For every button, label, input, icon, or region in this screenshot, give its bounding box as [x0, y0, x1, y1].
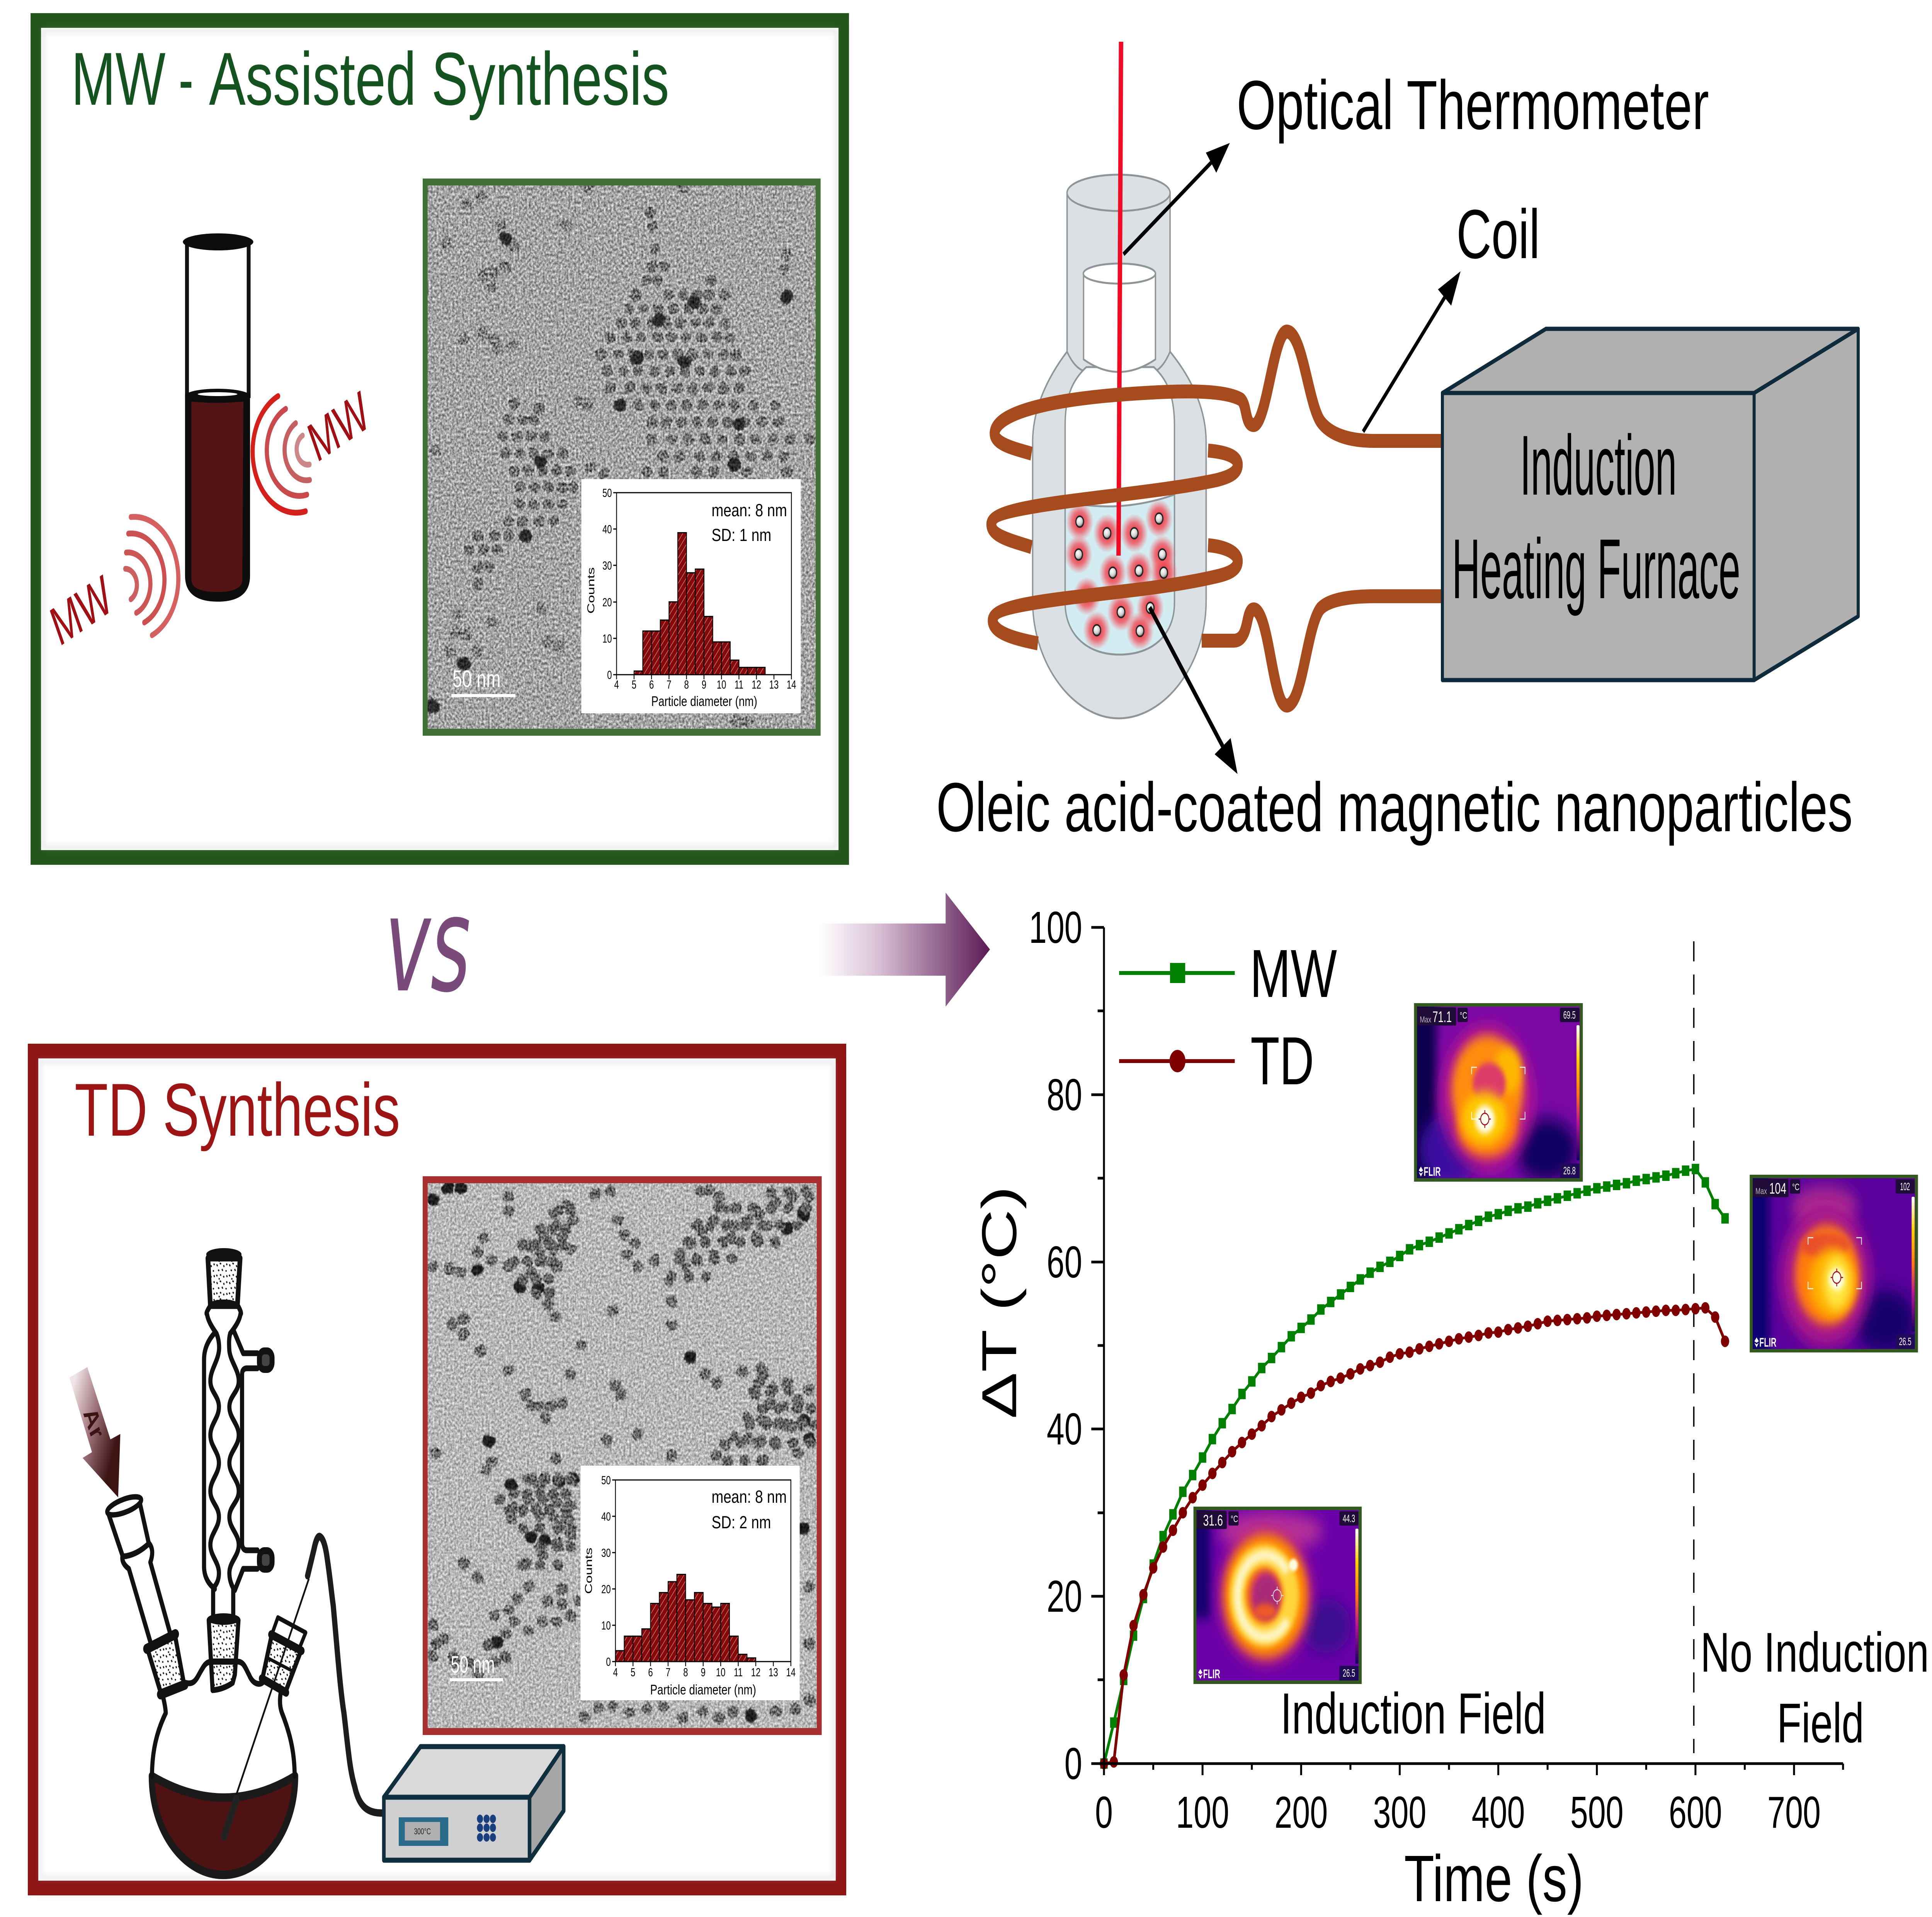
inset histogram: TD size distribution: 13: [769, 1665, 778, 1679]
legend: TD: [1250, 1023, 1314, 1099]
y tick labels: 0: [1065, 1739, 1082, 1789]
label: Ar: Ar: [79, 1403, 109, 1444]
thermocouple: [236, 1579, 309, 1795]
inset histogram: TD size distribution: 50: [601, 1473, 611, 1487]
condenser jacket: [204, 1333, 215, 1589]
thermal image: 71.1 °C: 71.1: [1432, 1009, 1452, 1026]
arrow: to optical thermometer: [1124, 143, 1230, 254]
arrow: to coil: [1363, 271, 1461, 432]
inset histogram: TD size distribution: 30: [601, 1546, 611, 1560]
inset histogram: MW size distribution: 40: [602, 522, 612, 536]
inset histogram: MW size distribution: 8: [684, 678, 689, 691]
legend: MW: [1250, 936, 1337, 1012]
y axis title: ΔT (°C): [972, 1186, 1027, 1419]
inset histogram: TD size distribution: 40: [601, 1510, 611, 1523]
icon: three-neck flask with condenser: [106, 1248, 309, 1875]
inset histogram: TD size distribution: 8: [683, 1665, 688, 1679]
thermal image: 31.6 °C: °C: [1231, 1514, 1238, 1524]
thermal image: 104 °C: 102: [1900, 1181, 1910, 1193]
thermal image: 71.1 °C: °C: [1460, 1010, 1467, 1021]
inset histogram: MW size distribution: 5: [632, 678, 636, 691]
icon: temperature controller: [384, 1747, 564, 1860]
heading: MW-assisted synthesis: -: [179, 37, 193, 121]
inset histogram: TD size distribution: 14: [786, 1665, 796, 1679]
histogram bars: [616, 1574, 756, 1662]
y tick labels: 20: [1047, 1572, 1082, 1621]
chart: temperature rise vs time: [972, 903, 1929, 1915]
thermal image: 104 °C: °C: [1792, 1182, 1799, 1192]
right neck joint: [272, 1618, 306, 1648]
y tick labels: 60: [1047, 1237, 1082, 1287]
inset histogram: TD size distribution: 6: [648, 1665, 653, 1679]
vs label: vs: [385, 868, 471, 1022]
scale bar: 50 nm: [451, 666, 515, 697]
optical thermometer beam: [1119, 42, 1121, 556]
y tick labels: 100: [1029, 903, 1082, 953]
inset histogram: MW size distribution: 50: [602, 486, 612, 500]
readouts: [1417, 1007, 1456, 1026]
inset histogram: MW size distribution: 20: [602, 595, 612, 609]
inset histogram: TD size distribution: 4: [613, 1665, 618, 1679]
left adapter: [109, 1502, 170, 1642]
heading: MW-assisted synthesis: MW: [71, 37, 165, 121]
x tick labels: 500: [1570, 1788, 1624, 1837]
centre neck joint: [209, 1620, 238, 1690]
legend: [1119, 936, 1337, 1099]
thermal image: 31.6 °C: 26.5: [1343, 1667, 1355, 1679]
TEM image: MW nanoparticles: [425, 182, 818, 732]
inset histogram: TD size distribution: 12: [751, 1665, 760, 1679]
thermal image: 71.1 °C: [1406, 999, 1583, 1184]
thermal image: 104 °C: [1742, 1170, 1918, 1356]
controller buttons: [477, 1815, 496, 1842]
inset histogram: TD size distribution: 7: [666, 1665, 670, 1679]
x tick labels: 0: [1095, 1788, 1113, 1837]
inset histogram: TD size distribution: mean: 8 nm: [712, 1488, 787, 1507]
flask liquid: [152, 1776, 295, 1875]
inset histogram: MW size distribution: 0: [607, 668, 612, 682]
x tick labels: 600: [1669, 1788, 1722, 1837]
condenser inner wavy tube: [210, 1334, 219, 1615]
inset histogram: MW size distribution: mean: 8 nm: [712, 501, 787, 520]
annotation: induction field: Induction Field: [1281, 1681, 1546, 1746]
furnace box: [1442, 329, 1858, 680]
inset histogram: TD size distribution: 20: [601, 1582, 611, 1596]
y tick labels: 40: [1047, 1404, 1082, 1454]
x tick labels: 200: [1274, 1788, 1328, 1837]
y tick labels: 80: [1047, 1070, 1082, 1120]
label: MW right: MW: [301, 380, 376, 474]
icon: argon inlet arrow: [70, 1367, 120, 1497]
inset histogram: TD size distribution: 5: [631, 1665, 635, 1679]
inset histogram: MW size distribution: [581, 479, 801, 713]
inset histogram: TD size distribution: [580, 1466, 800, 1700]
thermal image: 31.6 °C: FLIR: [1203, 1667, 1220, 1681]
inset histogram: MW size distribution: 13: [769, 678, 779, 691]
scale bar: 50 nm: 50 nm: [451, 1652, 495, 1678]
controller display: 300°C: [414, 1827, 431, 1837]
axes: [1091, 927, 1843, 1775]
inset histogram: MW size distribution: 30: [602, 559, 612, 572]
furnace label: [1452, 418, 1740, 616]
thermal image: 31.6 °C: 44.3: [1343, 1513, 1355, 1525]
condenser top joint: [208, 1258, 240, 1306]
furnace label: Induction: [1520, 418, 1677, 513]
thermal image: 71.1 °C: 69.5: [1563, 1009, 1576, 1021]
label: optical thermometer: Optical Thermometer: [1237, 67, 1709, 144]
coil: [992, 332, 1442, 706]
thermal image: 31.6 °C: 31.6: [1203, 1512, 1223, 1529]
thermal image: 104 °C: 26.5: [1899, 1336, 1912, 1348]
x tick labels: 300: [1373, 1788, 1426, 1837]
panel: TD synthesis: [33, 1051, 844, 1893]
histogram bars: [634, 533, 765, 675]
inset histogram: TD size distribution: Counts: [583, 1548, 594, 1594]
thermal image: 104 °C: Max: [1755, 1187, 1767, 1196]
inset histogram: MW size distribution: 9: [702, 678, 706, 691]
icon: test tube with dark liquid: [183, 233, 253, 602]
inset histogram: MW size distribution: 10: [717, 678, 726, 691]
annotation: no induction field: [1701, 1621, 1929, 1754]
inset histogram: MW size distribution: 12: [752, 678, 761, 691]
thermal image: 71.1 °C: 26.8: [1563, 1165, 1576, 1177]
x tick labels: 400: [1472, 1788, 1525, 1837]
readouts: [1753, 1179, 1789, 1197]
inset histogram: MW size distribution: 14: [787, 678, 796, 691]
inset histogram: TD size distribution: 10: [716, 1665, 725, 1679]
heading: MW-assisted synthesis: Assisted Synthesis: [209, 37, 669, 121]
icon: thermocouple cable: [308, 1536, 383, 1813]
inset histogram: MW size distribution: SD: 1 nm: [712, 526, 771, 545]
dashed field-off line: [1693, 941, 1695, 1753]
arrow: to nanoparticles: [1150, 607, 1238, 774]
inset histogram: MW size distribution: 6: [649, 678, 654, 691]
inset histogram: TD size distribution: Particle diameter (nm): [650, 1682, 756, 1698]
inset histogram: TD size distribution: 11: [734, 1665, 743, 1679]
icon: microwave waves right: [253, 380, 376, 513]
heading: TD synthesis: TD Synthesis: [75, 1068, 400, 1152]
label: nanoparticles: Oleic acid-coated magnetic nanoparticles: [936, 769, 1853, 846]
icon: microwave waves left: [44, 517, 179, 658]
x tick labels: [1095, 1788, 1821, 1837]
inset histogram: MW size distribution: 4: [614, 678, 619, 691]
inset histogram: TD size distribution: 9: [701, 1665, 706, 1679]
readouts: [1196, 1511, 1227, 1529]
inset histogram: TD size distribution: SD: 2 nm: [712, 1513, 771, 1532]
thermal image: 71.1 °C: FLIR: [1423, 1165, 1441, 1179]
TEM image: TD nanoparticles: [425, 1180, 819, 1732]
annotation: no induction field: No Induction: [1701, 1621, 1929, 1684]
diagram: induction heating setup: [936, 42, 1858, 846]
icon: sample vessel: [1032, 175, 1206, 718]
x axis title: Time (s): [1404, 1842, 1583, 1915]
y tick labels: [1029, 903, 1082, 1789]
thermal image: 71.1 °C: Max: [1420, 1015, 1431, 1025]
series: TD: [1104, 1308, 1725, 1764]
thermal image: 31.6 °C: [1185, 1502, 1362, 1684]
annotation: no induction field: Field: [1777, 1692, 1864, 1754]
inset histogram: TD size distribution: 10: [601, 1619, 611, 1632]
inset histogram: TD size distribution: 0: [606, 1655, 611, 1669]
flask body: [152, 1689, 295, 1776]
thermal image: 104 °C: 104: [1769, 1180, 1786, 1197]
thermal image: 104 °C: FLIR: [1759, 1335, 1776, 1349]
arrow: comparison to heating test: [820, 893, 990, 1007]
inset histogram: MW size distribution: 11: [735, 678, 743, 691]
panel: MW-assisted synthesis: [36, 20, 847, 862]
inset histogram: MW size distribution: Particle diameter (nm): [651, 694, 757, 709]
controller display: [399, 1817, 448, 1846]
furnace label: Heating Furnace: [1452, 522, 1740, 616]
label: MW left: MW: [44, 564, 119, 658]
inset histogram: MW size distribution: 10: [602, 632, 612, 645]
label: coil: Coil: [1456, 196, 1540, 273]
inset histogram: MW size distribution: 7: [667, 678, 672, 691]
x tick labels: 100: [1176, 1788, 1229, 1837]
inset histogram: MW size distribution: Counts: [585, 567, 597, 614]
series: MW: [1104, 1169, 1725, 1764]
scale bar: 50 nm: 50 nm: [452, 666, 501, 692]
nanoparticles with heat halos: [1065, 499, 1177, 650]
x tick labels: 700: [1767, 1788, 1821, 1837]
